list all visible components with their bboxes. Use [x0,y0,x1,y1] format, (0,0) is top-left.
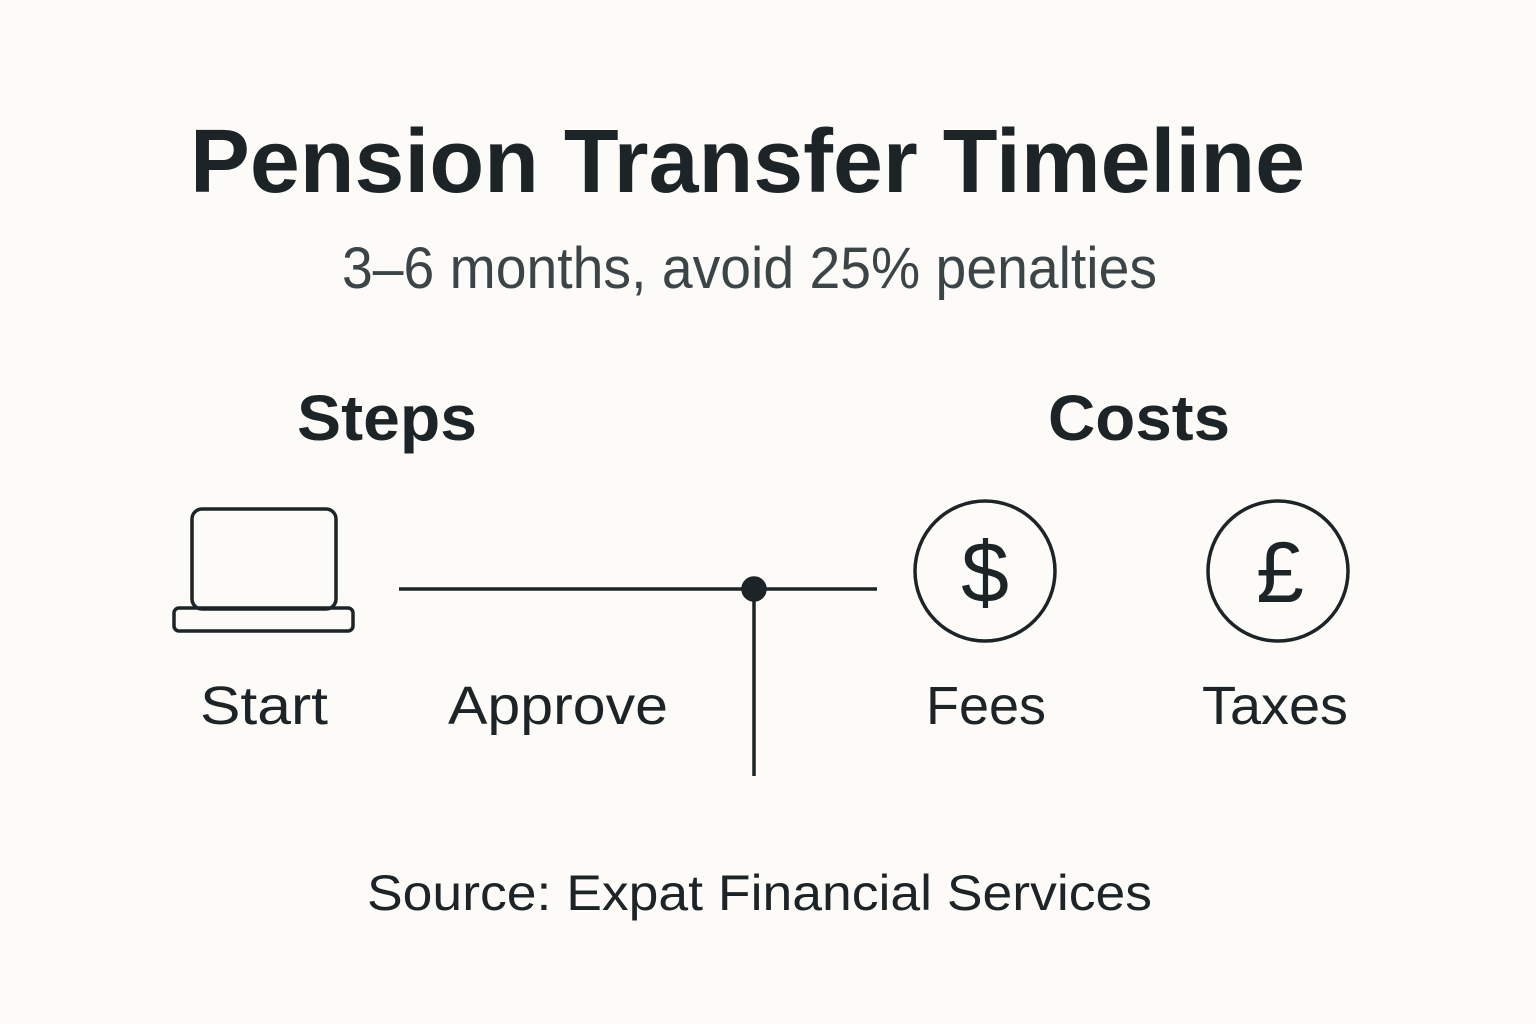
icon: pound [1208,501,1348,641]
subtitle: 3–6 months, avoid 25% penalties [342,236,1157,301]
label: start: Start [200,676,328,736]
label: approve: Approve [448,676,668,736]
heading: costs: Costs [1048,382,1230,454]
icon: laptop [174,509,353,631]
icon: pound: £ [1256,525,1304,621]
heading: steps: Steps [297,382,477,454]
label: fees: Fees [926,676,1046,736]
icon: dollar [915,501,1055,641]
timeline connector [399,578,877,776]
label: taxes: Taxes [1202,676,1348,736]
source: Source: Expat Financial Services [367,865,1152,921]
title: Pension Transfer Timeline [190,112,1305,212]
icon: dollar: $ [961,525,1009,621]
